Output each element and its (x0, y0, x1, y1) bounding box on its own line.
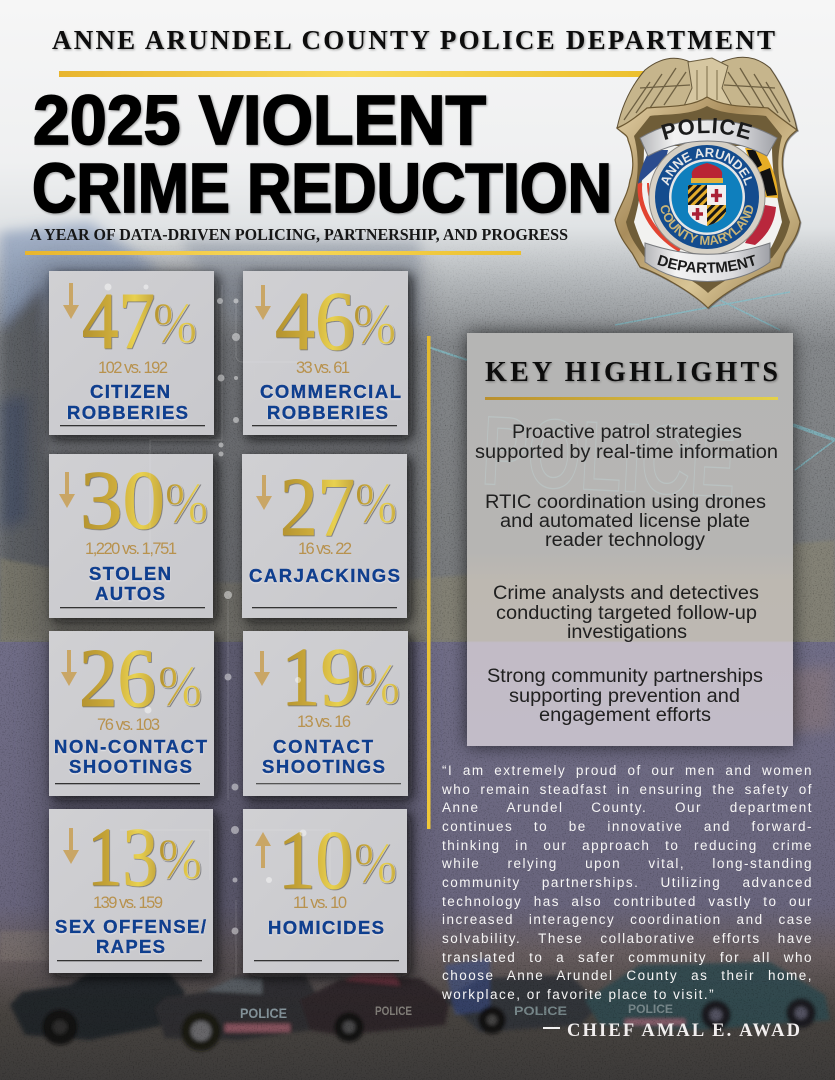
card: contact shootings (243, 631, 408, 796)
subtitle: A YEAR OF DATA-DRIVEN POLICING, PARTNERSHIP, AND PROGRESS (30, 225, 568, 244)
icon: down arrow (61, 650, 77, 686)
highlight: crime analysts: conducting targeted follow-up (496, 603, 757, 624)
quote from the chief: community partnerships. Utilizing advanced (442, 875, 813, 890)
stat: 46 percent: % (353, 293, 396, 356)
quote from the chief: continues to be innovative and forward- (442, 819, 813, 834)
label (54, 736, 208, 777)
card: commercial robberies (243, 271, 408, 435)
label (67, 381, 188, 423)
label: RAPES (96, 936, 165, 957)
badge: Maryland flag right (745, 148, 778, 198)
gold rule under department name (59, 71, 644, 77)
vertical gold divider (427, 336, 430, 829)
badge: crest (692, 163, 722, 180)
icon: down arrow (254, 651, 270, 686)
card: non-contact shootings (49, 631, 214, 796)
background: police vehicles: POLICE (240, 1005, 287, 1021)
label: STOLEN (89, 563, 171, 584)
label: HOMICIDES (268, 917, 384, 938)
icon: down arrow (256, 475, 272, 510)
icon: police badge: DEPARTMENT (657, 254, 755, 273)
quote from the chief: solvability. These collaborative efforts have (442, 931, 813, 946)
quote from the chief: workplace, or favorite place to visit.” (442, 987, 715, 1002)
highlight: crime analysts: investigations (567, 622, 687, 643)
stat: 27 percent: % (355, 472, 397, 535)
icon: police badge: POLICE (661, 118, 752, 140)
highlight: RTIC coordination: and automated license plate (500, 511, 750, 532)
label: COMMERCIAL (260, 381, 401, 402)
card: homicides (243, 809, 407, 973)
background: tan band (0, 540, 835, 642)
highlight: community partnerships: Strong community partnerships (487, 666, 763, 687)
icon: down arrow (255, 285, 271, 320)
badge: central seal (649, 139, 765, 255)
background: dark grain behind the cards (36, 262, 420, 987)
icon: police badge: COUNTY MARYLAND (660, 205, 754, 246)
comparison: 13 vs. 16 (297, 713, 351, 731)
background: police vehicles: POLICE (628, 1002, 673, 1016)
stat: 47 percent: 47 (82, 278, 155, 366)
stat: 19 percent: % (357, 653, 400, 716)
label: CONTACT (273, 736, 374, 757)
header: department name: ANNE ARUNDEL COUNTY POLICE DEPARTMENT (52, 25, 775, 55)
highlight: proactive patrol: Proactive patrol strategies (512, 422, 742, 443)
stat: 19 percent: 19 (281, 631, 360, 724)
comparison: 102 vs. 192 (98, 359, 168, 377)
title: CRIME REDUCTION (32, 149, 612, 227)
badge: shield body (615, 97, 800, 308)
icon: up arrow (255, 832, 271, 868)
icon: police badge: ANNE ARUNDEL (661, 148, 752, 186)
quote from the chief: increased interagency coordination and case (442, 912, 813, 927)
quote from the chief: translated to a safer community for all who (442, 950, 813, 965)
gold rule under subtitle (25, 251, 521, 255)
title: 2025 VIOLENT (33, 81, 486, 159)
stat: 47 percent: % (153, 292, 197, 355)
highlight: RTIC coordination (485, 492, 766, 551)
circuit network overlay (104, 284, 330, 975)
stat: 10 percent: 10 (278, 814, 353, 907)
icon: down arrow (63, 828, 79, 864)
label: SHOOTINGS (69, 756, 192, 777)
label: CARJACKINGS (249, 565, 400, 586)
background: purple lower section (0, 642, 835, 1080)
badge: POLICE banner (640, 120, 777, 156)
stat: 10 percent: % (354, 832, 397, 895)
highlight: RTIC coordination: reader technology (545, 530, 706, 551)
label: SHOOTINGS (262, 756, 385, 777)
comparison: 76 vs. 103 (97, 716, 160, 734)
label (55, 916, 206, 957)
label: SEX OFFENSE/ (55, 916, 206, 937)
icon: down arrow (63, 283, 79, 319)
label: AUTOS (95, 583, 165, 604)
stat: 46 percent (275, 275, 396, 368)
stat: 30 percent (80, 454, 208, 547)
label (89, 563, 171, 604)
quote from the chief: choose Anne Arundel County as their home, (442, 968, 813, 983)
card: carjackings (242, 454, 407, 618)
stat: 46 percent: 46 (275, 275, 355, 368)
comparison: 1,220 vs. 1,751 (85, 540, 177, 558)
highlight: RTIC coordination: RTIC coordination using drones (485, 492, 766, 513)
stat: 27 percent: 27 (280, 461, 355, 554)
label: CITIZEN (90, 381, 170, 402)
highlight: proactive patrol (475, 422, 778, 463)
stat: 13 percent: % (158, 828, 202, 891)
label: NON-CONTACT (54, 736, 208, 757)
stat: 26 percent (79, 632, 202, 725)
stat: 30 percent: 30 (80, 454, 165, 547)
highlight: community partnerships (487, 666, 763, 726)
comparison: 16 vs. 22 (298, 540, 352, 558)
heading: key highlights: KEY HIGHLIGHTS (485, 357, 778, 388)
badge: DEPARTMENT banner (645, 243, 770, 282)
stat: 26 percent: 26 (79, 632, 156, 725)
card: stolen autos (49, 454, 213, 618)
label (262, 736, 385, 777)
quote from the chief: thinking in our approach to reducing crime (442, 838, 813, 853)
quote from the chief: Anne Arundel County. Our department (442, 800, 813, 815)
label: ROBBERIES (267, 402, 388, 423)
stat: 26 percent: % (158, 655, 202, 718)
quote from the chief: “I am extremely proud of our men and women (442, 763, 813, 778)
highlight: community partnerships: engagement efforts (539, 705, 711, 726)
quote from the chief: technology has also contributed vastly to our (442, 894, 813, 909)
attribution: CHIEF AMAL E. AWAD (567, 1021, 800, 1041)
card: sex offense / rapes (49, 809, 213, 973)
background: teal light streaks (428, 290, 835, 470)
quote from the chief: who remain steadfast in ensuring the safety of (442, 782, 813, 797)
highlight: proactive patrol: supported by real-time information (475, 442, 778, 463)
badge: eagle wings (617, 57, 797, 130)
background: police vehicles: POLICE (514, 1004, 567, 1018)
background: police vehicles (10, 958, 830, 1051)
highlight: community partnerships: supporting prevention and (509, 686, 740, 707)
panel: key highlights (467, 333, 793, 746)
stat: 13 percent: 13 (87, 811, 158, 904)
comparison: 33 vs. 61 (296, 359, 350, 377)
badge: flag left (640, 183, 680, 250)
quote from the chief (442, 763, 813, 1002)
background: police vehicles: POLICE (375, 1004, 412, 1018)
quote from the chief: while relying upon vital, long-standing (442, 856, 813, 871)
card: citizen robberies (49, 271, 214, 435)
comparison: 11 vs. 10 (293, 894, 347, 912)
highlight: crime analysts: Crime analysts and detectives (493, 583, 759, 604)
stat: 47 percent (82, 278, 197, 366)
icon: down arrow (59, 472, 75, 508)
background: officer silhouette left (0, 222, 420, 640)
comparison: 139 vs. 159 (93, 894, 163, 912)
label: ROBBERIES (67, 402, 188, 423)
stat: 30 percent: % (165, 472, 208, 535)
label (260, 381, 401, 423)
icon: police badge (614, 56, 802, 310)
title (32, 81, 612, 227)
highlight: crime analysts (493, 583, 759, 643)
